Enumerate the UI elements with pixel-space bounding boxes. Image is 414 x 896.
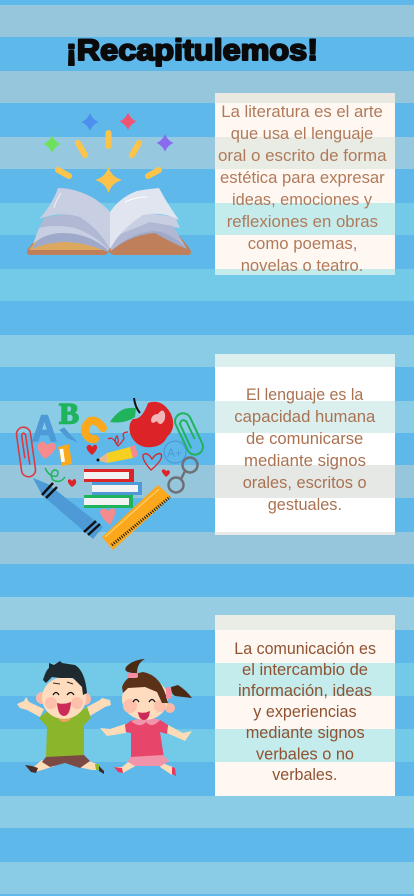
- paperclip: green: [172, 411, 206, 457]
- outline heart: [143, 454, 162, 470]
- text: comunicación: [234, 639, 376, 784]
- pink heart low: [100, 508, 115, 525]
- books: [84, 469, 142, 508]
- text: literatura: La literatura es el arte: [221, 102, 383, 121]
- text: literatura: reflexiones en obras: [227, 212, 378, 231]
- A+ stamp: A+: [167, 446, 182, 460]
- boy shorts: [42, 755, 90, 768]
- girl bows: [127, 673, 138, 678]
- girl hair: [122, 672, 168, 703]
- text: comunicación: La comunicación es: [234, 639, 376, 658]
- text: lenguaje: orales, escritos o: [243, 473, 367, 492]
- boy shirt: [39, 707, 91, 757]
- apple: [110, 398, 173, 447]
- text: lenguaje: mediante signos: [244, 451, 366, 470]
- boy head: [36, 692, 48, 704]
- boy collar: [58, 716, 73, 722]
- paperclip: red: [16, 426, 36, 478]
- text: comunicación: el intercambio de: [242, 660, 368, 679]
- pencil: [96, 445, 138, 463]
- text: comunicación: mediante signos: [246, 723, 365, 742]
- panel: lenguaje: [215, 354, 395, 535]
- letter C: [85, 421, 103, 439]
- small hearts: [68, 445, 170, 487]
- boy: [17, 661, 111, 774]
- text: literatura: que usa el lenguaje: [231, 124, 373, 143]
- text: lenguaje: El lenguaje es la: [246, 385, 364, 404]
- text: comunicación: información, ideas: [238, 681, 372, 700]
- text: lenguaje: capacidad humana: [234, 407, 376, 426]
- glasses: [168, 458, 198, 492]
- panel: literatura: [215, 93, 395, 275]
- girl: [100, 659, 192, 776]
- book pages: [32, 188, 188, 252]
- A+ stamp: [164, 441, 186, 463]
- light rays: [58, 133, 159, 176]
- girl dress: [125, 720, 168, 758]
- girl skirt: [128, 755, 169, 766]
- girl head: [165, 703, 175, 713]
- panel: comunicación: [215, 615, 395, 796]
- text: literatura: oral o escrito de forma: [218, 146, 387, 165]
- girl collar: [131, 716, 160, 725]
- text: lenguaje: [234, 385, 376, 514]
- letter A: A: [32, 408, 57, 449]
- girl arms and legs: [100, 724, 192, 741]
- red scribble: [108, 432, 128, 446]
- crayon: [33, 478, 103, 539]
- text: literatura: ideas, emociones y: [232, 190, 372, 209]
- letter B: B: [59, 398, 79, 430]
- text: comunicación: y experiencias: [253, 702, 357, 721]
- text: lenguaje: de comunicarse: [246, 429, 363, 448]
- text: literatura: novelas o teatro.: [241, 256, 363, 275]
- text: literatura: [218, 102, 387, 275]
- boy face: [53, 692, 74, 695]
- book cover: [27, 228, 191, 255]
- icon: open book with sparkles: [27, 112, 191, 255]
- text: literatura: como poemas,: [248, 234, 357, 253]
- letter i: [58, 444, 72, 466]
- green squiggle: [45, 468, 65, 481]
- text: lenguaje: gestuales.: [268, 495, 342, 514]
- ruler: [102, 485, 171, 550]
- text: comunicación: verbales o no: [256, 744, 354, 764]
- pink heart: [38, 442, 56, 459]
- title: ¡Recapitulemos!: [66, 34, 318, 67]
- text: literatura: estética para expresar: [220, 168, 385, 187]
- sparkles: [44, 112, 174, 193]
- icon: jumping children: [17, 659, 192, 776]
- boy arms and legs: [17, 697, 111, 717]
- girl face: [133, 700, 155, 702]
- boy hair: [43, 661, 87, 695]
- push pin: [60, 428, 77, 442]
- icon: heart of school supplies: [16, 398, 206, 550]
- text: comunicación: verbales.: [272, 765, 337, 784]
